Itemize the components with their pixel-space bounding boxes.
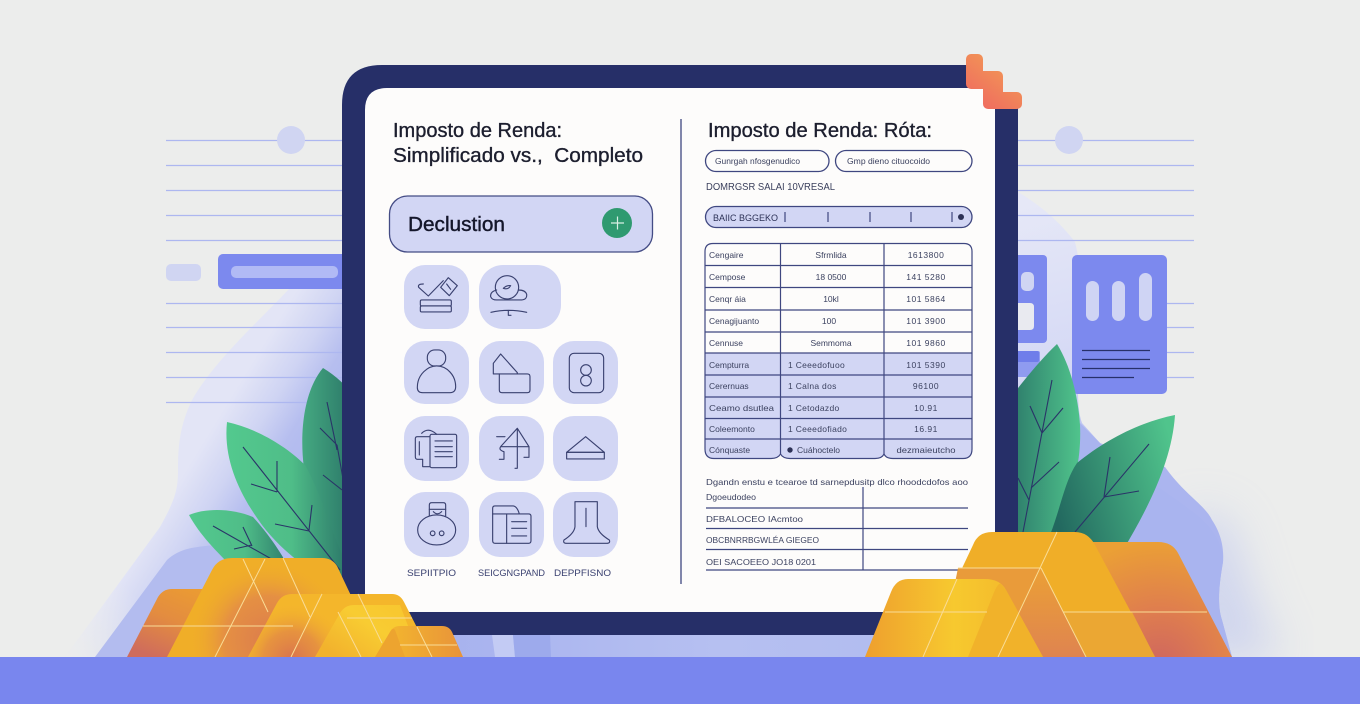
center divider <box>680 119 682 584</box>
gold bar grid lines <box>143 558 457 657</box>
heading: left panel title: Imposto de Renda: <box>393 120 562 142</box>
icon captions: SEPIITPIO <box>407 568 456 579</box>
leaf: tall <box>1018 344 1080 532</box>
band under the tablet <box>400 600 1040 660</box>
table row 10 <box>709 445 956 455</box>
leaves: left plant <box>189 368 342 576</box>
leaf: small <box>189 510 284 560</box>
table row 4: Cenagijuanto <box>709 316 759 326</box>
slider bar: BAIIC BGGEKO <box>713 213 778 224</box>
table row 7: Cerernuas <box>709 381 749 391</box>
table row 9: Coleemonto <box>709 424 755 434</box>
table row 2: Cempose <box>709 272 746 282</box>
table row 5 <box>709 338 946 348</box>
gold bar: tall center <box>920 532 1155 657</box>
table row 8 <box>709 403 938 413</box>
panel: right partial chart <box>1000 255 1047 377</box>
icon: funnel <box>553 492 618 557</box>
table row 2 <box>709 272 946 282</box>
notes table: OEI SACOEEO JO18 0201 <box>706 557 816 567</box>
table row 4: 100 <box>822 316 836 326</box>
table row 8: 10.91 <box>914 403 938 413</box>
left decorative lines <box>166 140 342 402</box>
icon: red corner ribbon <box>971 59 1017 104</box>
gold bar: front yellow <box>865 579 1043 657</box>
notes table: Dgoeudodeo <box>706 492 756 502</box>
table row 3: Cenqr áia <box>709 294 746 304</box>
table row 9: 16.91 <box>914 424 938 434</box>
icon: cloud coin <box>479 265 561 329</box>
table row 6: 1 Ceeedofuoo <box>788 360 845 370</box>
table row 10: Cuáhoctelo <box>797 445 840 455</box>
table row 4 <box>709 316 946 326</box>
soft right background glow <box>1190 510 1285 660</box>
table row 1: Sfrmlida <box>815 250 847 260</box>
blob: left background shape <box>65 288 420 657</box>
heading: left panel title: Simplificado vs., Completo <box>393 145 643 167</box>
option pills: Gunrgah nfosgenudico <box>715 156 800 166</box>
icon: tent <box>479 416 544 481</box>
table row 4: 101 3900 <box>906 316 946 326</box>
table row 3: 10kl <box>823 294 839 304</box>
table row 6: Cempturra <box>709 360 749 370</box>
table row 8: 1 Cetodazdo <box>788 403 840 413</box>
table row 3: 101 5864 <box>906 294 946 304</box>
leaf: wide <box>1050 415 1175 550</box>
table row 8: Ceamo dsutlea <box>709 403 774 413</box>
table row 5: 101 9860 <box>906 338 946 348</box>
table row 3 <box>709 294 946 304</box>
notes table: Dgandn enstu e tcearoe td sarnepdusitp dlco rhoodcdofos aoo <box>706 477 968 487</box>
gold bar: front center <box>248 594 432 657</box>
panel: deduction button <box>390 196 652 252</box>
gold bars: right pile <box>865 532 1232 657</box>
gold bar: far right small <box>375 626 463 657</box>
circle: right line marker <box>1055 126 1083 154</box>
icon: person <box>404 341 469 404</box>
gold bar: orange sliver <box>375 629 405 657</box>
table row 6 <box>709 360 946 370</box>
notes table <box>706 477 968 570</box>
subheading: DOMRGSR SALAI 10VRESAL <box>706 182 835 193</box>
data table <box>705 244 972 458</box>
small pill: left <box>166 264 201 281</box>
icon captions: SEICGNGPAND <box>478 568 545 579</box>
table row 6: 101 5390 <box>906 360 946 370</box>
icon captions: DEPPFISNO <box>554 568 611 579</box>
option pills <box>706 150 972 172</box>
table row 1: Cengaire <box>709 250 744 260</box>
option pills: Gmp dieno cituocoido <box>847 156 930 166</box>
table row 7: 1 Calna dos <box>788 381 837 391</box>
leaf: middle <box>226 422 342 576</box>
panel: right bar chart card <box>1072 255 1167 394</box>
blob: right background shape <box>1000 180 1232 657</box>
circle: left line marker <box>277 126 305 154</box>
gold bar: back right <box>1085 542 1232 657</box>
heading: left panel title <box>393 120 643 167</box>
gold bar: tall center <box>167 558 380 657</box>
gold bars: left pile <box>127 558 463 657</box>
table row 2: 18 0500 <box>816 272 847 282</box>
leaf: back <box>302 368 342 554</box>
icon: checkmark and stack <box>404 265 469 329</box>
gold bar grid lines <box>885 532 1207 657</box>
panel: icon grid <box>404 265 618 557</box>
table row 1: 1613800 <box>908 250 944 260</box>
icon: round character <box>404 492 469 557</box>
blob: left bottom fade <box>65 567 160 657</box>
right decorative lines <box>1018 140 1194 378</box>
table row 9 <box>709 424 938 434</box>
table row 9: 1 Ceeedofiado <box>788 424 847 434</box>
table row 10: Cónquaste <box>709 445 750 455</box>
table row 2: 141 5280 <box>906 272 946 282</box>
blob: right lower shape <box>1020 423 1232 657</box>
icon captions <box>407 568 611 579</box>
table row 5: Cennuse <box>709 338 743 348</box>
gold bar: yellow small <box>315 605 420 657</box>
heading: right panel title: Imposto de Renda: Róta: <box>708 120 932 142</box>
table row 7: 96100 <box>913 381 939 391</box>
icon: rounded box with circles <box>553 341 618 404</box>
table row 7 <box>709 381 939 391</box>
icon: house box <box>479 341 544 404</box>
icon: folder <box>479 492 544 557</box>
slider bar <box>706 206 972 228</box>
icon: document <box>404 416 469 481</box>
leaves: right plant <box>1018 344 1175 542</box>
notes table: OBCBNRRBGWLÉA GIEGEO <box>706 535 819 545</box>
panel: deduction button: Declustion <box>408 214 505 236</box>
bar: left blue <box>218 254 348 289</box>
gold bar: back left <box>127 589 260 657</box>
notes table: DFBALOCEO IAcmtoo <box>706 514 803 524</box>
blob: left inner darker shape <box>95 520 300 657</box>
tablet frame <box>342 65 1018 635</box>
table row 10: dezmaieutcho <box>896 445 956 455</box>
tablet screen <box>365 88 995 612</box>
table row 5: Semmoma <box>810 338 852 348</box>
table row 1 <box>709 250 944 260</box>
icon: triangle lid <box>553 416 618 481</box>
ground band <box>0 657 1360 704</box>
